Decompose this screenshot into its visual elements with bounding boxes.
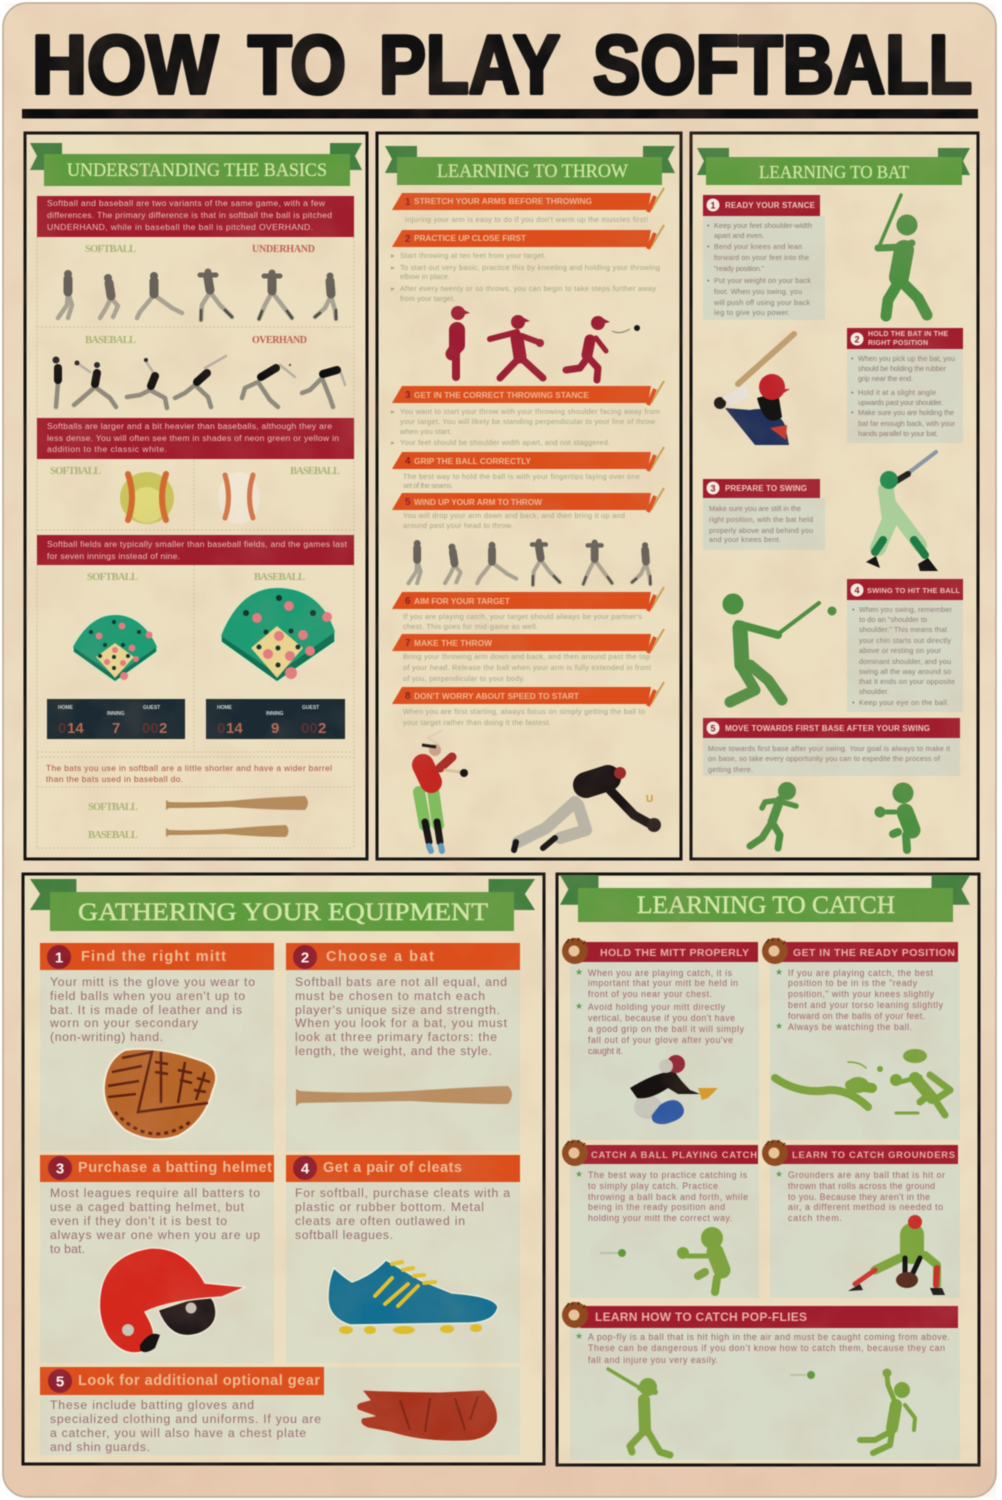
- section 2: bat: Choose a bat: [326, 949, 434, 965]
- section 2: bat: must be chosen to match each: [295, 989, 485, 1003]
- step 4: SWING TO HIT THE BALL: [867, 586, 960, 595]
- step 6: AIM FOR YOUR TARGET: [414, 596, 511, 606]
- section: catch a ball: [562, 1140, 759, 1298]
- section: hold the mitt: When you are playing catch, it is: [588, 968, 733, 978]
- section 2: bat: look at three primary factors: the: [295, 1030, 497, 1044]
- section 2: bat: 2: [301, 950, 309, 966]
- section 4: cleats: plastic or rubber bottom. Metal: [295, 1200, 484, 1214]
- section 4: cleats: softball leagues.: [295, 1228, 393, 1242]
- scoreboard: baseball: 00: [301, 720, 318, 737]
- step 3: your target. You will likely be standing perpendicular to your line of throw: [400, 417, 656, 426]
- step 8: 8: [405, 691, 411, 702]
- scoreboard: softball: 14: [67, 720, 84, 737]
- step 5: WIND UP YOUR ARM TO THROW: [414, 497, 542, 507]
- section: grounders: [762, 1140, 960, 1298]
- section: ready position: GET IN THE READY POSITION: [793, 947, 955, 959]
- section 4: cleats: cleats are often outlawed in: [295, 1214, 465, 1228]
- section 3: helmet: 3: [56, 1160, 64, 1178]
- step 1: apart and even.: [714, 231, 764, 240]
- step 4: your chin starts out directly: [859, 636, 951, 645]
- step 5: around past your head to throw.: [403, 521, 513, 530]
- step 3: GET IN THE CORRECT THROWING STANCE: [414, 390, 589, 400]
- step 3: Make sure you are still in the: [709, 504, 801, 513]
- section: catch a ball: throwing a ball back and forth, while: [588, 1192, 748, 1202]
- step 4: •: [852, 698, 855, 707]
- step 1: Put your weight on your back: [714, 276, 811, 285]
- section 2: bat: When you look for a bat, you must: [295, 1016, 508, 1030]
- icon: small ball: U: [646, 794, 653, 805]
- text block: ball size: [37, 418, 354, 459]
- text block: field size: [37, 535, 354, 565]
- heading ribbon: learning to throw: [385, 146, 675, 185]
- step 4: dominant shoulder, and you: [859, 657, 951, 666]
- step 2: 2: [405, 234, 411, 245]
- step 3: [703, 479, 825, 550]
- scoreboard: softball: 0: [58, 720, 66, 737]
- label: softball: SOFTBALL: [50, 466, 101, 477]
- section: catch a ball: being in the ready position and: [588, 1202, 725, 1212]
- step 1: READY YOUR STANCE: [725, 201, 816, 210]
- light green batter mid swing: [866, 452, 938, 571]
- icon: batting helmet: [99, 1248, 246, 1353]
- section: grounders: thrown that rolls across the ground: [788, 1181, 935, 1191]
- step 1: 1: [710, 200, 716, 210]
- step 4: [847, 579, 963, 712]
- step 4: set of the seams.: [403, 481, 453, 490]
- scoreboard: baseball: 14: [226, 720, 243, 737]
- fielder catching grounder: [848, 1215, 945, 1295]
- step 2: bat far enough back, with your: [858, 419, 956, 428]
- step 3: when you start.: [399, 427, 452, 436]
- panel: understanding the basics: [25, 133, 367, 859]
- section: grounders: catch them.: [788, 1213, 842, 1223]
- section 2: bat: Softball bats are not all equal, and: [295, 975, 507, 989]
- section: hold the mitt: a good grip on the ball it will simply: [588, 1024, 745, 1034]
- step 4: •: [852, 605, 855, 614]
- infielder diving for ball: [514, 767, 661, 850]
- step 2: should be holding the rubber: [858, 364, 947, 373]
- section: hold the mitt: vertical, because if you don't have: [588, 1013, 735, 1023]
- section: catch a ball: holding your mitt the correct way.: [588, 1213, 732, 1223]
- step 2: grip near the end.: [858, 374, 913, 383]
- section 5: optional gear: 5: [56, 1374, 64, 1390]
- step 1: foot. When you swing, you: [714, 287, 802, 296]
- section: pop-flies: [562, 1302, 960, 1460]
- text block: bats: The bats you use in softball are a little shorter and have a wider barrel: [46, 763, 332, 773]
- section: grounders: ★: [775, 1169, 783, 1179]
- scoreboard: baseball: 0: [217, 720, 225, 737]
- text block: ball size: addition to the classic white.: [47, 444, 167, 454]
- text block: pitching difference: UNDERHAND, while in baseball the ball is pitched OVERHAND.: [47, 222, 313, 232]
- step 4: 4: [854, 586, 860, 596]
- windup sequence: [408, 539, 650, 585]
- step 2: PRACTICE UP CLOSE FIRST: [414, 233, 527, 243]
- label: softball: SOFTBALL: [87, 572, 138, 583]
- step 2: Make sure you are holding the: [858, 408, 954, 417]
- step 2: hands parallel to your bat.: [858, 429, 938, 438]
- step 3: and your knees bent.: [709, 535, 781, 544]
- step 5: getting there.: [708, 765, 753, 774]
- heading ribbon: learning to throw: LEARNING TO THROW: [437, 161, 628, 182]
- section 4: cleats: 4: [301, 1160, 310, 1178]
- section 5: optional gear: a catcher, you will also have a chest plate: [50, 1426, 306, 1440]
- label: baseball: BASEBALL: [254, 572, 305, 583]
- heading ribbon: learning to bat: [697, 148, 970, 185]
- section 3: helmet: Purchase a batting helmet: [78, 1160, 272, 1176]
- text block: field size: Softball fields are typically smaller than baseball fields, and the games last: [47, 539, 348, 549]
- heading ribbon: understanding the basics: UNDERSTANDING THE BASICS: [67, 160, 327, 181]
- section: catch a ball: The best way to practice catching is: [588, 1170, 748, 1180]
- step 7: 7: [405, 638, 411, 649]
- step 1: "ready position.": [714, 264, 764, 273]
- step 3: ▸: [391, 438, 395, 447]
- step 2: When you pick up the bat, you: [858, 354, 955, 363]
- section 3: helmet: [40, 1155, 274, 1363]
- heading ribbon: gathering your equipment: [30, 879, 535, 931]
- step 7: MAKE THE THROW: [414, 638, 492, 648]
- heading ribbon: learning to catch: [560, 875, 970, 922]
- section 3: helmet: even if they don't it is best to: [50, 1214, 227, 1228]
- step 7: of you, perpendicular to your body.: [403, 674, 525, 683]
- section 2: bat: length, the weight, and the style.: [295, 1044, 492, 1058]
- step 4: swing all the way around so: [859, 667, 951, 676]
- step 3: properly above and behind you: [709, 526, 813, 535]
- step 2: RIGHT POSITION: [868, 340, 928, 347]
- step 5: on base, so take every opportunity you can to expedite the process of: [708, 754, 941, 763]
- section: catch a ball: ★: [575, 1169, 583, 1179]
- section: pop-flies: fall and injure you very easily.: [588, 1355, 718, 1365]
- step 4: that it ends on your opposite: [859, 677, 955, 686]
- section: grounders: Grounders are any ball that is hit or: [788, 1170, 945, 1180]
- section 3: helmet: use a caged batting helmet, but: [50, 1200, 245, 1214]
- step 2: •: [851, 408, 854, 417]
- step 1: STRETCH YOUR ARMS BEFORE THROWING: [414, 196, 592, 206]
- section 5: optional gear: These include batting gloves and: [50, 1398, 254, 1412]
- step 6: If you are playing catch, your target should always be your partner's: [403, 612, 642, 621]
- step 6: [392, 587, 664, 631]
- icon: baseball bat: [166, 825, 288, 837]
- text block: pitching difference: differences. The primary difference is that in softball the ball is pitched: [47, 210, 332, 220]
- step 5: You will drop your arm down and back, and then bring it up and: [403, 511, 625, 520]
- scoreboard: baseball: GUEST: [302, 705, 319, 711]
- label: baseball bat: BASEBALL: [88, 830, 138, 841]
- section 4: cleats: For softball, purchase cleats with a: [295, 1186, 510, 1200]
- section: hold the mitt: fall out of your glove after you've: [588, 1035, 733, 1045]
- step 2: upwards past your shoulder.: [858, 398, 943, 407]
- green sliding runner and catcher: [775, 1049, 950, 1115]
- step 5: MOVE TOWARDS FIRST BASE AFTER YOUR SWING: [725, 724, 930, 733]
- step 4: to do an "shoulder to: [859, 615, 927, 624]
- section: ready position: Always be watching the ball.: [788, 1022, 912, 1032]
- step 7: Bring your throwing arm down and back, and then around past the top: [403, 652, 650, 661]
- icon: bat: [296, 1086, 512, 1106]
- scoreboard: baseball: HOME: [217, 705, 233, 711]
- section: hold the mitt: HOLD THE MITT PROPERLY: [600, 947, 749, 959]
- section 1: mitt: field balls when you aren't up to: [50, 989, 245, 1003]
- section 1: mitt: Your mitt is the glove you wear to: [50, 975, 255, 989]
- section: ready position: ★: [775, 1021, 783, 1031]
- step 4: When you swing, remember: [859, 605, 953, 614]
- step 7: [392, 629, 664, 683]
- section 1: mitt: [40, 943, 274, 1151]
- step 3: [391, 381, 664, 447]
- baseball pitching sequence: [52, 356, 345, 408]
- step 1: Keep your feet shoulder-width: [714, 221, 812, 230]
- step 3: PREPARE TO SWING: [725, 484, 807, 493]
- step 3: You want to start your throw with your throwing shoulder facing away from: [400, 407, 660, 416]
- icon: cleat: [328, 1260, 498, 1334]
- step 1: forward on your feet into the: [714, 253, 809, 262]
- icon: batting glove: [357, 1390, 497, 1441]
- section: ready position: bent and your torso leaning slightly: [788, 1000, 944, 1010]
- step 2: Start throwing at ten feet from your target.: [400, 251, 546, 260]
- step 1: •: [707, 276, 710, 285]
- step 3: Your feet should be shoulder width apart, and not staggered.: [400, 438, 610, 447]
- step 4: shoulder.: [859, 687, 889, 696]
- scoreboard: softball: GUEST: [143, 705, 160, 711]
- section: pop-flies: These can be dangerous if you don't know how to catch them, because they can: [588, 1343, 945, 1353]
- text block: bats: than the bats used in baseball do.: [46, 774, 183, 784]
- green batter pop fly: [608, 1369, 670, 1455]
- section 2: bat: player's unique size and strength.: [295, 1003, 500, 1017]
- section: catch a ball: CATCH A BALL PLAYING CATCH: [591, 1149, 757, 1160]
- step 3: right position, with the bat held: [709, 515, 813, 524]
- scoreboard: baseball: INNING: [266, 711, 284, 717]
- step 1: 1: [405, 197, 411, 208]
- step 3: ▸: [391, 407, 395, 416]
- step 2: •: [851, 388, 854, 397]
- step 8: When you are first starting, always focus on simply getting the ball to: [403, 707, 645, 716]
- maroon throwing figures: [451, 306, 640, 380]
- step 5: [703, 718, 960, 776]
- step 4: The best way to hold the ball is with your fingertips laying over one: [403, 472, 640, 481]
- section 2: bat: [286, 943, 520, 1151]
- step 4: shoulder." This means that: [859, 625, 947, 634]
- step 1: [703, 195, 825, 320]
- green catcher pop fly: [860, 1369, 915, 1453]
- step 2: [847, 328, 963, 443]
- step 4: above or resting on your: [859, 646, 942, 655]
- step 3: 3: [405, 390, 411, 401]
- step 2: Hold it at a slight angle: [858, 388, 936, 397]
- step 8: your target rather than doing it the fastest.: [403, 718, 551, 727]
- section 1: mitt: Find the right mitt: [81, 949, 226, 965]
- icon: baseball: [218, 472, 260, 524]
- text block: ball size: less dense. You will often see them in shades of neon green or yellow in: [47, 433, 339, 443]
- heading ribbon: gathering your equipment: GATHERING YOUR EQUIPMENT: [78, 899, 488, 926]
- section: grounders: air, a different method is needed to: [788, 1202, 943, 1212]
- catcher figure: [630, 1055, 718, 1124]
- section 3: helmet: Most leagues require all batters to: [50, 1186, 260, 1200]
- step 5: Move towards first base after your swing. Your goal is always to make it: [708, 744, 950, 753]
- step 5: 5: [710, 724, 716, 734]
- step 1: •: [707, 242, 710, 251]
- title: TO: [248, 18, 346, 111]
- step 2: ▸: [391, 284, 395, 293]
- scoreboard: baseball: 2: [318, 720, 326, 737]
- step 8: DON'T WORRY ABOUT SPEED TO START: [414, 691, 580, 701]
- label: baseball: BASEBALL: [290, 466, 340, 477]
- scoreboard: softball: 00: [142, 720, 159, 737]
- section: hold the mitt: [562, 938, 759, 1140]
- section 1: mitt: (non-writing) hand.: [50, 1030, 163, 1044]
- step 4: [392, 447, 664, 490]
- scoreboard: softball: HOME: [58, 705, 74, 711]
- heading ribbon: understanding the basics: [30, 143, 362, 186]
- softball player throwing: [419, 730, 468, 851]
- step 2: HOLD THE BAT IN THE: [868, 331, 948, 338]
- label: underhand: UNDERHAND: [252, 244, 315, 255]
- label: softball bat: SOFTBALL: [88, 802, 138, 813]
- heading ribbon: learning to catch: LEARNING TO CATCH: [637, 892, 895, 919]
- batter with red helmet: [714, 334, 794, 445]
- section: pop-flies: LEARN HOW TO CATCH POP-FLIES: [595, 1310, 807, 1324]
- step 4: Keep your eye on the ball.: [859, 698, 949, 707]
- step 2: 2: [854, 334, 860, 344]
- section 3: helmet: always wear one when you are up: [50, 1228, 260, 1242]
- text block: pitching difference: [37, 196, 354, 237]
- scoreboard: softball: 2: [159, 720, 167, 737]
- step 2: ▸: [391, 251, 395, 260]
- green runner: [750, 783, 796, 848]
- softball field diagram: [73, 615, 157, 682]
- section: hold the mitt: front of you near your chest.: [588, 989, 712, 999]
- step 6: 6: [405, 596, 411, 607]
- scoreboard: baseball: 9: [271, 720, 279, 737]
- scoreboard: softball: INNING: [107, 711, 125, 717]
- section: ready position: position," with your knees slightly: [788, 989, 935, 999]
- panel: learning to throw: [377, 133, 681, 859]
- text block: bats: [46, 763, 332, 784]
- icon: catcher's mitt: [104, 1049, 216, 1139]
- scoreboard: baseball: [206, 699, 345, 739]
- section: pop-flies: A pop-fly is a ball that is hit high in the air and must be caught coming from above.: [588, 1332, 950, 1342]
- title: PLAY: [379, 18, 560, 111]
- step 1: •: [707, 221, 710, 230]
- text block: field size: for seven innings instead of nine.: [47, 551, 180, 561]
- section 5: optional gear: [40, 1367, 520, 1455]
- panel: gathering your equipment: [23, 874, 544, 1464]
- panel: learning to catch: [557, 874, 979, 1465]
- section: hold the mitt: ★: [575, 1001, 583, 1011]
- section: ready position: ★: [775, 967, 783, 977]
- section: hold the mitt: Avoid holding your mitt directly: [588, 1002, 726, 1012]
- text block: pitching difference: Softball and baseball are two variants of the same game, with a few: [47, 198, 326, 208]
- section: pop-flies: ★: [575, 1331, 583, 1341]
- step 5: [392, 488, 664, 530]
- section: ready position: If you are playing catch, the best: [788, 968, 934, 978]
- section 1: mitt: worn on your secondary: [49, 1016, 199, 1030]
- step 2: [391, 225, 664, 303]
- step 4: 4: [405, 456, 411, 467]
- step 1: will push off using your back: [713, 298, 810, 307]
- baseball field diagram: [221, 588, 335, 682]
- section: catch a ball: to simply play catch. Practice: [588, 1181, 718, 1191]
- green batter stance: [878, 195, 927, 316]
- step 2: elbow in place.: [400, 272, 450, 281]
- section 5: optional gear: Look for additional optional gear: [78, 1373, 320, 1389]
- green figure swinging: [724, 595, 836, 702]
- scoreboard: softball: 7: [112, 720, 120, 737]
- step 2: After every twenty or so throws, you can begin to take steps further away: [400, 284, 656, 293]
- step 1: leg to give you power.: [714, 308, 790, 317]
- section: hold the mitt: important that your mitt be held in: [588, 978, 738, 988]
- label: softball: SOFTBALL: [85, 244, 136, 255]
- heading ribbon: learning to bat: LEARNING TO BAT: [759, 162, 909, 182]
- label: baseball: BASEBALL: [85, 335, 136, 346]
- section 5: optional gear: specialized clothing and uniforms. If you are: [50, 1412, 321, 1426]
- icon: softball bat: [166, 796, 308, 810]
- icon: softball: [120, 472, 174, 524]
- step 2: ▸: [391, 263, 395, 272]
- label: overhand: OVERHAND: [252, 335, 307, 346]
- scoreboard: softball: [47, 699, 185, 739]
- step 1: Bend your knees and lean: [714, 242, 802, 251]
- section: hold the mitt: ★: [575, 967, 583, 977]
- title: [32, 18, 972, 111]
- section 4: cleats: Get a pair of cleats: [323, 1160, 462, 1176]
- section 5: optional gear: and shin guards.: [50, 1440, 150, 1454]
- step 2: To start out very basic, practice this by kneeling and holding your throwing: [400, 263, 660, 272]
- step 2: •: [851, 354, 854, 363]
- step 5: 5: [405, 497, 411, 508]
- section 3: helmet: to bat.: [50, 1242, 85, 1256]
- text block: ball size: Softballs are larger and a bit heavier than baseballs, although they are: [47, 421, 332, 431]
- step 2: from your target.: [400, 294, 455, 303]
- section 1: mitt: bat. It is made of leather and is: [50, 1003, 242, 1017]
- step 6: chest. This goes for mid-game as well.: [403, 622, 538, 631]
- step 4: GRIP THE BALL CORRECTLY: [414, 456, 531, 466]
- title: HOW: [32, 18, 219, 111]
- green catcher with ball: [600, 1227, 723, 1292]
- section: grounders: LEARN TO CATCH GROUNDERS: [792, 1149, 955, 1160]
- panel: learning to bat: [691, 133, 978, 859]
- section: ready position: forward on the balls of your feet.: [788, 1011, 925, 1021]
- softball pitching sequence: [58, 268, 336, 320]
- section 4: cleats: [286, 1155, 520, 1363]
- icon: pop-fly ball: [790, 1371, 815, 1379]
- step 1: Injuring your arm is easy to do if you don't warm up the muscles first!: [405, 215, 648, 224]
- title rule: [22, 109, 978, 118]
- step 3: 3: [710, 484, 716, 494]
- step 7: of your head. Release the ball when your arm is fully extended in front: [403, 663, 651, 672]
- section: hold the mitt: caught it.: [588, 1046, 623, 1056]
- step 8: [392, 682, 664, 727]
- section: ready position: position to be in is the "ready: [788, 978, 918, 988]
- section: grounders: to you. Because they aren't in the: [788, 1192, 930, 1202]
- section 1: mitt: 1: [55, 950, 63, 966]
- section: ready position: [762, 938, 960, 1140]
- green crouching catcher: [875, 783, 913, 850]
- step 1: [392, 188, 664, 224]
